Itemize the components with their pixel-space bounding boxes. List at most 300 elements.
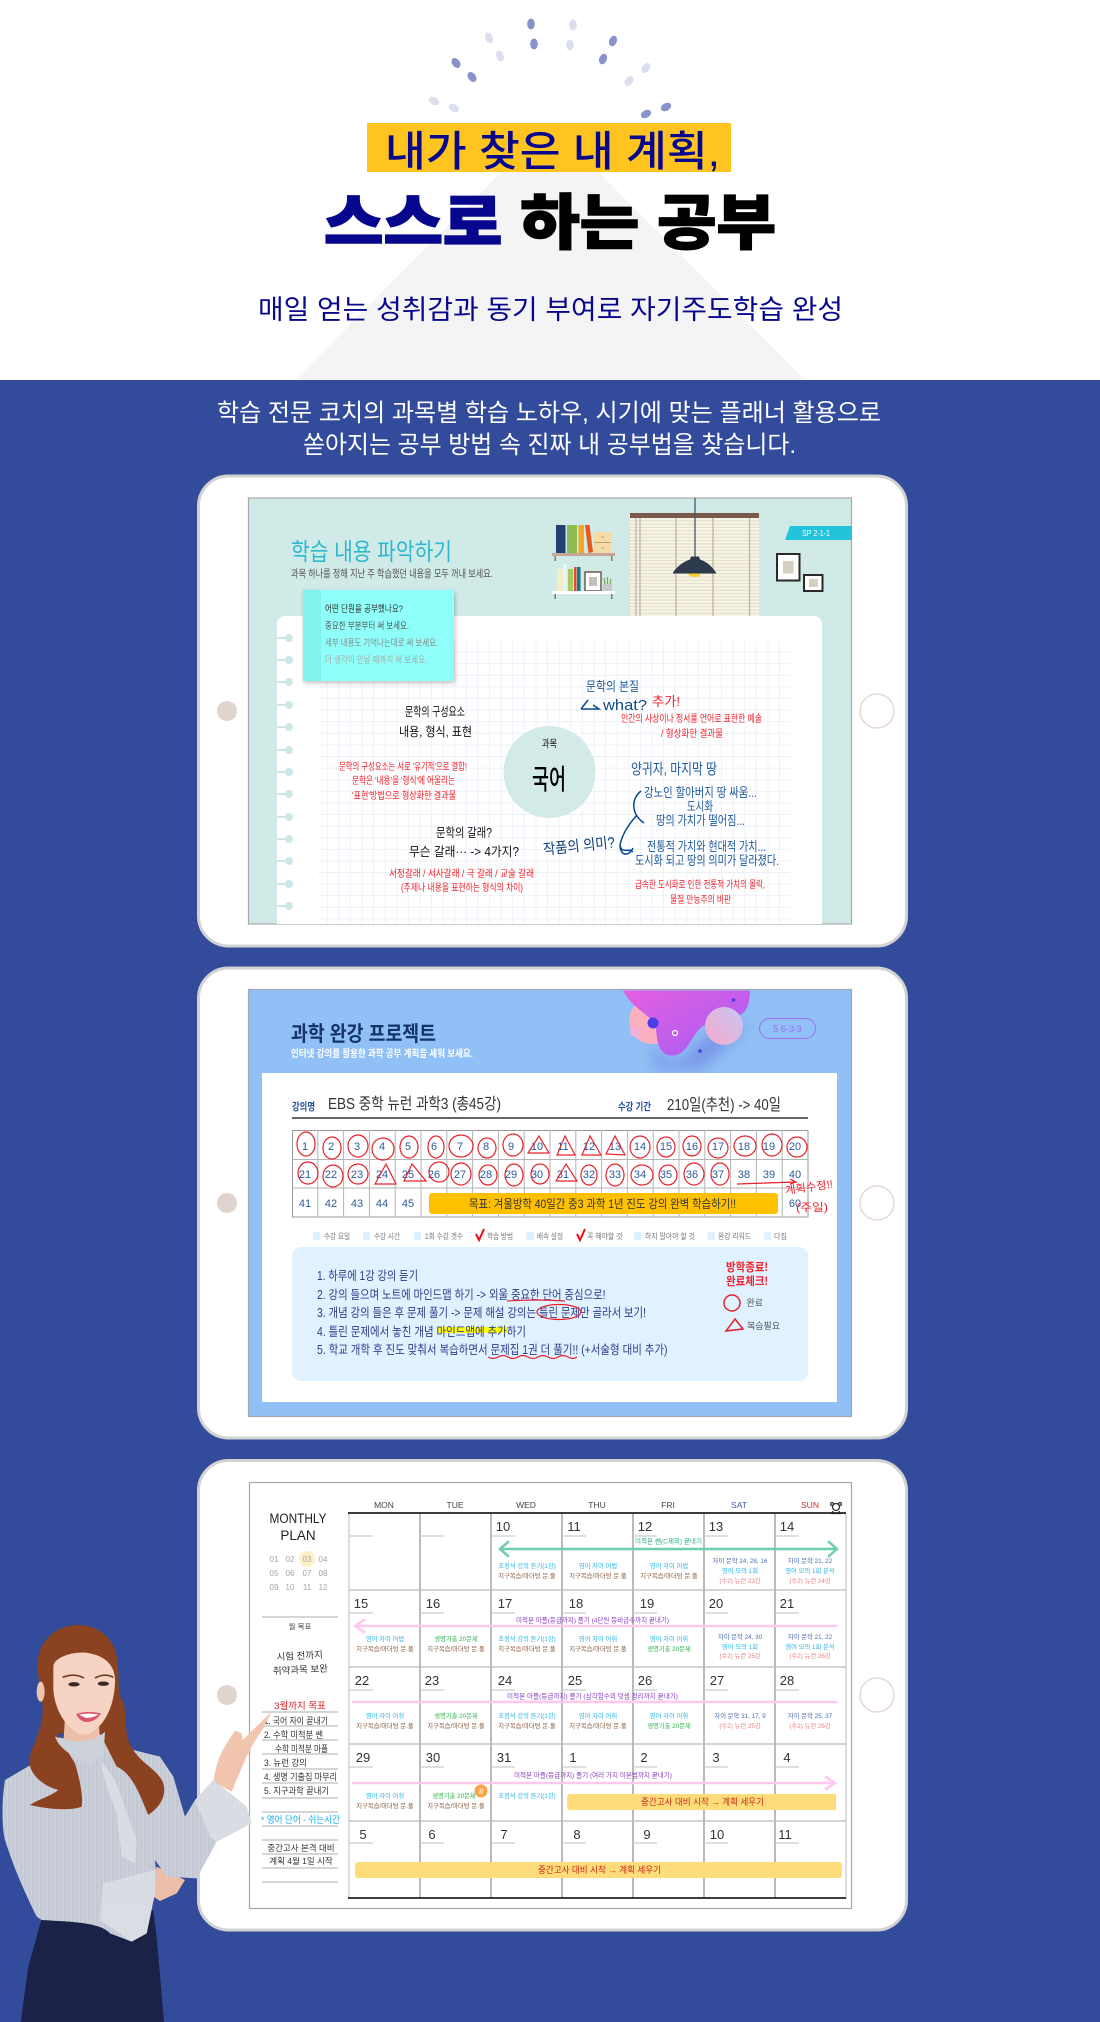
- panel: tablet 2, science lecture project: [198, 968, 906, 1438]
- calendar date numbers: 15: [354, 1596, 368, 1611]
- calendar weekday headers: SAT: [731, 1500, 747, 1510]
- trousers: [21, 1910, 164, 2022]
- calendar task text: (수2) 뉴런 26강: [789, 1721, 831, 1730]
- blouse ruffle and cuffs: [100, 1760, 252, 1942]
- sidebar: goals list: 취약과목 보완: [273, 1663, 328, 1677]
- calendar date numbers: 26: [638, 1673, 652, 1688]
- goal banner: [429, 1193, 778, 1214]
- lecture check table: 22: [325, 1169, 337, 1181]
- sidebar: month selector: 06: [286, 1569, 295, 1578]
- lecture check table: 6: [431, 1141, 437, 1153]
- calendar date numbers: 11: [778, 1827, 792, 1842]
- handwritten notes: components of literature: [339, 705, 472, 802]
- handwritten notes: essence of literature: 추가!: [652, 694, 680, 709]
- lecture name and period row: 수강 기간: [618, 1100, 651, 1113]
- notebook rings: [277, 634, 293, 910]
- facial features: [63, 1675, 113, 1722]
- calendar task text: 영어 모의 1회 분석: [785, 1566, 835, 1575]
- title line 2: 스스로 하는 공부: [324, 190, 776, 257]
- handwritten notes: the last land: 물질 만능주의 비판: [670, 894, 731, 906]
- calendar task text: 지구복습/마더텅 문.풀: [498, 1571, 556, 1580]
- calendar weekday headers: MON: [374, 1500, 394, 1510]
- handwritten notes: genres of literature: 서정갈래 / 서사갈래 / 극 갈래 / 교술 갈래: [389, 867, 534, 880]
- red handwritten annotation: [737, 1178, 834, 1214]
- calendar date numbers: 16: [426, 1596, 440, 1611]
- sticky note: 어떤 단원을 공부했나요?: [325, 603, 403, 615]
- lecture check table: 15: [660, 1141, 672, 1153]
- calendar task text: 지구복습/마더텅 문.풀: [498, 1721, 556, 1730]
- handwritten notes: the last land: 땅의 가치가 떨어짐...: [656, 813, 745, 828]
- sidebar: goals list: 계획 4월 1일 시작: [269, 1856, 333, 1866]
- completion check key: 복습필요: [747, 1320, 780, 1331]
- calendar task text: 초정석 강의 듣기(1강): [498, 1634, 556, 1643]
- person: presenter pointing at the plan: [2, 1625, 272, 2022]
- legend row: 하지 말아야 할 것: [645, 1231, 695, 1241]
- lecture check table: 25: [402, 1169, 414, 1181]
- study method box: 2. 강의 들으며 노트에 마인드맵 하기 -> 외울 중요한 단어 중심으로!: [317, 1288, 606, 1302]
- lecture check table: 9: [508, 1141, 514, 1153]
- calendar date numbers: 27: [710, 1673, 724, 1688]
- page heading: 학습 내용 파악하기: [291, 539, 452, 566]
- sidebar: goals list: 시험 전까지: [276, 1650, 323, 1663]
- legend row: 배속 설정: [537, 1231, 563, 1241]
- sidebar: monthly plan heading: MONTHLY: [270, 1511, 326, 1526]
- exam preparation bars: 중간고사 대비 시작 → 계획 세우기: [538, 1864, 661, 1875]
- calendar date numbers: 21: [780, 1596, 794, 1611]
- lecture check table: 23: [351, 1169, 363, 1181]
- study method box: 5. 학교 개학 후 진도 맞춰서 복습하면서 문제집 1권 더 풀기!! (+서술형 대비 추가): [317, 1343, 668, 1357]
- calendar task text: 영어 자이 어휘: [650, 1634, 688, 1643]
- calendar date numbers: 9: [643, 1827, 651, 1842]
- screen background: [248, 990, 852, 1416]
- lecture check table: 11: [557, 1141, 569, 1153]
- lecture check table: 10: [531, 1141, 543, 1153]
- calendar grid: [348, 1513, 846, 1898]
- title line 1 with yellow highlight: 내가 찾은 내 계획,: [385, 128, 720, 175]
- handwritten notes: genres of literature: [389, 826, 534, 894]
- calendar task text: 생명기출 20문제: [647, 1721, 691, 1730]
- calendar task text: 생명기출 20문제: [434, 1711, 478, 1720]
- resting hand: [153, 1867, 185, 1901]
- sidebar: month selector: 11: [303, 1583, 312, 1592]
- legend row: 학습 방법: [487, 1231, 513, 1241]
- calendar date numbers: 17: [498, 1596, 512, 1611]
- sidebar: month selector: 10: [286, 1583, 295, 1592]
- calendar task text: 자이 문학 31, 17, 9: [714, 1711, 766, 1720]
- red handwritten annotation: (주일): [796, 1200, 828, 1214]
- ruffled collar: [55, 1732, 105, 1765]
- calendar task text: (수2) 뉴런 24강: [789, 1576, 831, 1585]
- lecture check table: 29: [505, 1169, 517, 1181]
- icon: orange completion badge: [474, 1784, 488, 1798]
- calendar task text: 자이 문학 21, 22: [788, 1556, 833, 1565]
- schedule arrow captions: 미적분 쎈(C제외) 끝내기: [635, 1536, 702, 1546]
- calendar weekday headers: [374, 1500, 819, 1510]
- lecture check table: 8: [483, 1141, 489, 1153]
- sidebar: month selector: [270, 1551, 328, 1592]
- intro text: 학습 전문 코치의 과목별 학습 노하우, 시기에 맞는 플래너 활용으로: [217, 399, 881, 427]
- lecture check table: 1: [302, 1141, 308, 1153]
- calendar task text: 지구복습/마더텅 문.풀: [356, 1721, 414, 1730]
- lecture check table: 35: [660, 1169, 672, 1181]
- lecture check table: 16: [686, 1141, 698, 1153]
- calendar task text: 지구복습/마더텅 문.풀: [427, 1721, 485, 1730]
- subtitle: 매일 얻는 성취감과 동기 부여로 자기주도학습 완성: [258, 295, 843, 325]
- sidebar: month selector: 03: [303, 1555, 312, 1564]
- lecture check table: 42: [325, 1198, 337, 1210]
- sidebar: month selector: 12: [319, 1583, 328, 1592]
- calendar task text: 영어 모의 1회 분석: [785, 1642, 835, 1651]
- icon: picture frames: [777, 554, 822, 591]
- calendar date numbers: 25: [568, 1673, 582, 1688]
- white content panel: [262, 1073, 837, 1402]
- lecture check table: 36: [686, 1169, 698, 1181]
- lecture check table: 32: [583, 1169, 595, 1181]
- sidebar: month selector: 07: [303, 1569, 312, 1578]
- calendar task text: 초정석 강의 듣기(1강): [498, 1711, 556, 1720]
- background: white header: [0, 0, 1100, 380]
- lecture check table: 39: [763, 1169, 775, 1181]
- sidebar: goals list: * 영어 단어 - 쉬는시간: [261, 1815, 340, 1826]
- tablet home button: [860, 1678, 894, 1712]
- handwritten note and brace: meaning of the work: [542, 791, 644, 859]
- sidebar: month selector: 08: [319, 1569, 328, 1578]
- calendar task text: 영어 자이 어휘: [650, 1711, 688, 1720]
- handwritten notes: essence of literature: [581, 679, 762, 740]
- red handwritten annotation: 계획수정!!: [784, 1178, 834, 1197]
- lecture check table: 31: [557, 1169, 569, 1181]
- lecture check table: 12: [583, 1141, 595, 1153]
- calendar date numbers: 8: [573, 1827, 581, 1842]
- calendar date numbers: 2: [640, 1750, 648, 1765]
- lecture check table: 21: [299, 1169, 311, 1181]
- icon: window blinds: [630, 513, 759, 616]
- completion check key: [724, 1260, 780, 1331]
- legend row: 수강 요일: [324, 1231, 350, 1241]
- sidebar: goals list: 월 목표: [289, 1621, 311, 1631]
- handwritten notes: genres of literature: 문학의 갈래?: [436, 826, 492, 840]
- handwritten notes: components of literature: 문학은 '내용'을 '형식'에 어울리는: [352, 775, 455, 787]
- calendar task text: 자이 문학 24, 28, 16: [713, 1556, 768, 1565]
- sidebar: monthly plan heading: PLAN: [280, 1528, 316, 1543]
- study method box: 3. 개념 강의 들은 후 문제 풀기 -> 문제 해설 강의는 틀린 문제만 골라서 보기!: [317, 1306, 646, 1320]
- calendar task text: 영어 자이 어휘: [579, 1711, 617, 1720]
- lecture check table: 37: [712, 1169, 724, 1181]
- handwritten notes: components of literature: '표현'방법으로 형상화한 결과물: [352, 790, 456, 802]
- notebook grid: [318, 641, 790, 924]
- lecture check table: 20: [789, 1141, 801, 1153]
- sidebar: goals list: 수학 미적분 마플: [275, 1743, 328, 1754]
- intro text: 쏟아지는 공부 방법 속 진짜 내 공부법을 찾습니다.: [303, 431, 796, 459]
- calendar date numbers: 11: [567, 1519, 581, 1534]
- tablet frame: [198, 476, 906, 946]
- handwritten notes: genres of literature: 무슨 갈래··· -> 4가지?: [409, 845, 519, 859]
- sidebar: month selector: 09: [270, 1583, 279, 1592]
- center circle: subject Korean: 과목: [542, 738, 557, 750]
- lecture check table: 5: [405, 1141, 411, 1153]
- handwritten notes: the last land: 도시화 되고 땅의 의미가 달라졌다.: [635, 853, 779, 868]
- calendar task text: 지구복습/마더텅 문.풀: [427, 1801, 485, 1810]
- calendar task text: (수2) 뉴런 26강: [789, 1651, 831, 1660]
- calendar date numbers: 10: [710, 1827, 724, 1842]
- legend row: 다짐: [774, 1231, 787, 1241]
- tablet home button: [860, 694, 894, 728]
- lecture name and period row: 210일(추천) -> 40일: [667, 1096, 781, 1114]
- exam preparation bars: [355, 1794, 842, 1878]
- handwritten notes: components of literature: 문학의 구성요소는 서로 '유기적'으로 결합!: [339, 761, 467, 773]
- lecture check table: 60: [789, 1198, 801, 1210]
- raised hand: [213, 1712, 272, 1792]
- lecture check table: 28: [480, 1169, 492, 1181]
- panel: tablet 3, monthly plan calendar: [198, 1460, 906, 1930]
- intro text: [217, 399, 881, 459]
- calendar date numbers: 31: [497, 1750, 511, 1765]
- sidebar: month selector: 01: [270, 1555, 279, 1564]
- schedule arrow captions: [507, 1536, 702, 1780]
- handwritten note and brace: meaning of the work: 작품의 의미?: [542, 834, 616, 859]
- calendar task text: 영어 자이 어법: [579, 1561, 617, 1570]
- lecture name and period row: 강의명: [292, 1101, 315, 1113]
- calendar task text: 생명기출 20문제: [647, 1644, 691, 1653]
- calendar task text: 지구복습/마더텅 문.풀: [427, 1644, 485, 1653]
- sidebar: month selector: 02: [286, 1555, 295, 1564]
- lecture check table: 30: [531, 1169, 543, 1181]
- calendar date numbers: 14: [780, 1519, 794, 1534]
- lecture check table: 41: [299, 1198, 311, 1210]
- calendar date numbers: 29: [356, 1750, 370, 1765]
- handwritten notes: components of literature: 내용, 형식, 표현: [399, 725, 472, 739]
- calendar task text: (수2) 뉴런 25강: [719, 1721, 761, 1730]
- lecture check table: 27: [454, 1169, 466, 1181]
- calendar task text: 자이 문학 25, 37: [788, 1711, 833, 1720]
- calendar date numbers: 5: [359, 1827, 367, 1842]
- schedule arrow captions: 미적분 마플(등급까지) 풀기 (여러 가지 미분법까지 끝내기): [514, 1770, 672, 1780]
- calendar date numbers: 30: [426, 1750, 440, 1765]
- neck: [63, 1713, 100, 1743]
- icon: burst of radial dots: [427, 18, 673, 120]
- calendar date numbers: 18: [569, 1596, 583, 1611]
- completion check key: 완료: [746, 1298, 763, 1308]
- sidebar: goals list: 4. 생명 기출집 마무리: [264, 1771, 337, 1782]
- calendar task text: 초정석 강의 듣기(1강): [498, 1561, 556, 1570]
- tablet frame: [198, 968, 906, 1438]
- page subheading: 과목 하나를 정해 지난 주 학습했던 내용을 모두 꺼내 보세요.: [291, 567, 493, 580]
- calendar weekday headers: THU: [588, 1500, 606, 1510]
- lecture check table: 33: [609, 1169, 621, 1181]
- goal banner: 목표: 겨울방학 40일간 중3 과학 1년 진도 강의 완벽 학습하기!!: [469, 1197, 736, 1211]
- sidebar: goals list: 중간고사 본격 대비: [267, 1843, 335, 1853]
- center circle: subject Korean: [504, 726, 596, 818]
- lecture check table: 44: [376, 1198, 388, 1210]
- lecture check table: 38: [738, 1169, 750, 1181]
- calendar weekday headers: TUE: [446, 1500, 464, 1510]
- study method box: [292, 1247, 808, 1381]
- calendar date numbers: 20: [709, 1596, 723, 1611]
- calendar task text: (수2) 뉴런 25강: [719, 1651, 761, 1660]
- calendar task text: 자이 문학 24, 30: [718, 1632, 763, 1641]
- calendar weekday headers: SUN: [801, 1500, 819, 1510]
- calendar task text: 영어 자이 어법: [650, 1561, 688, 1570]
- calendar date numbers: 7: [500, 1827, 508, 1842]
- calendar task text: 지구복습/마더텅 문.풀: [498, 1644, 556, 1653]
- handwritten notes: the last land: 급속한 도시화로 인한 전통적 가치의 몰락,: [635, 879, 765, 891]
- calendar date numbers: 3: [712, 1750, 720, 1765]
- icon: hanging lamp: [673, 498, 716, 577]
- handwritten notes: essence of literature: / 형상화한 결과물: [661, 728, 723, 740]
- calendar task text: 초정석 강의 듣기(1강): [498, 1791, 556, 1800]
- tag: 5 6-3-3: 5 6-3-3: [773, 1024, 802, 1034]
- completion check key: 방학종료!: [726, 1260, 768, 1274]
- lecture check table: 43: [351, 1198, 363, 1210]
- screen background: [250, 1482, 852, 1908]
- calendar task text: 지구복습/마더텅 문.풀: [640, 1571, 698, 1580]
- lecture check table: 24: [376, 1169, 388, 1181]
- calendar date numbers: 10: [496, 1519, 510, 1534]
- calendar task text: 자이 문학 21, 22: [788, 1632, 833, 1641]
- lecture check table: 18: [738, 1141, 750, 1153]
- tag: 5 6-3-3: [760, 1018, 816, 1038]
- sticky note: 중요한 부분부터 써 보세요.: [325, 621, 409, 632]
- screen background: [248, 498, 852, 924]
- tablet camera dot: [217, 701, 237, 721]
- handwritten notes: essence of literature: what?: [602, 697, 647, 714]
- handwritten notes: the last land: [631, 761, 779, 906]
- sidebar: goals list: 3. 뉴런 강의: [264, 1758, 307, 1768]
- sticky note: 더 생각이 안날 때까지 써 보세요.: [325, 654, 427, 666]
- calendar task text: 지구복습/마더텅 문.풀: [569, 1571, 627, 1580]
- tablet camera dot: [217, 1193, 237, 1213]
- calendar date numbers: 24: [498, 1673, 512, 1688]
- calendar weekday headers: FRI: [661, 1500, 675, 1510]
- calendar task text: 영어 자이 어휘: [366, 1791, 404, 1800]
- handwritten notes: the last land: 강노인 할아버지 땅 싸움...: [644, 785, 757, 800]
- sidebar: goals list: [261, 1617, 340, 1882]
- sidebar: month selector: 04: [319, 1555, 328, 1564]
- face: [53, 1652, 115, 1735]
- calendar date numbers: 1: [569, 1750, 577, 1765]
- calendar task text: 영어 모의 1회: [722, 1566, 758, 1575]
- completion check key: 완료체크!: [726, 1275, 768, 1288]
- schedule arrow captions: 미적분 마플(등급까지) 풀기 (삼각함수의 덧셈 정리까지 끝내기): [507, 1692, 678, 1700]
- handwritten notes: the last land: 전통적 가치와 현대적 가치...: [647, 839, 766, 854]
- calendar task text: [356, 1556, 835, 1810]
- study method box: 4. 틀린 문제에서 놓친 개념 마인드맵에 추가하기: [317, 1325, 526, 1339]
- highlight: [437, 1327, 507, 1333]
- tag: SP 2-1-1: SP 2-1-1: [802, 528, 830, 538]
- lecture check table: 2: [328, 1141, 334, 1153]
- calendar date numbers: 6: [428, 1827, 436, 1842]
- lecture check table: 40: [789, 1169, 801, 1181]
- blouse: [2, 1732, 252, 1942]
- study method box: 1. 하루에 1강 강의 듣기: [317, 1269, 418, 1283]
- sticky note: 세부 내용도 기억나는대로 써 보세요.: [325, 637, 438, 649]
- exam preparation bars: 중간고사 대비 시작 → 계획 세우기: [641, 1796, 764, 1807]
- center circle: subject Korean: 국어: [532, 764, 566, 795]
- subheading: 인터넷 강의를 활용한 과학 공부 계획을 세워 보세요.: [291, 1047, 473, 1060]
- handwritten notes: components of literature: 문학의 구성요소: [405, 705, 465, 719]
- calendar task text: 영어 자이 어휘: [579, 1634, 617, 1643]
- handwritten notes: essence of literature: 인간의 사상이나 정서를 언어로 표현한 예술: [621, 713, 762, 725]
- calendar task text: 영어 자이 어휘: [366, 1711, 404, 1720]
- calendar task text: 영어 모의 1회: [722, 1642, 758, 1651]
- icon: orange completion badge: 끝: [478, 1788, 484, 1796]
- sidebar: goals list: 1. 국어 자이 끝내기: [264, 1716, 328, 1726]
- calendar date numbers: 28: [780, 1673, 794, 1688]
- calendar date numbers: 19: [640, 1596, 654, 1611]
- lecture check table: 34: [634, 1169, 646, 1181]
- calendar task text: 지구복습/마더텅 문.풀: [569, 1721, 627, 1730]
- calendar date numbers: 12: [638, 1519, 652, 1534]
- tablet home button: [860, 1186, 894, 1220]
- calendar task text: 지구복습/마더텅 문.풀: [356, 1801, 414, 1810]
- legend row: 1회 수강 갯수: [425, 1231, 463, 1241]
- tablet camera dot: [217, 1685, 237, 1705]
- icon: shelves with books: [552, 525, 615, 599]
- sidebar: monthly plan heading: [270, 1511, 326, 1543]
- calendar weekday headers: WED: [516, 1500, 536, 1510]
- handwritten notes: genres of literature: (주제나 내용을 표현하는 형식의 차이): [401, 881, 523, 894]
- panel: tablet 1, study content mind map: [198, 476, 906, 946]
- background: grey triangle: [295, 123, 805, 380]
- lecture check table: 45: [402, 1198, 414, 1210]
- lecture check table: 4: [379, 1141, 385, 1153]
- tablet frame: [198, 1460, 906, 1930]
- sticky note: [303, 590, 454, 681]
- sidebar: goals list: 5. 지구과학 끝내기: [264, 1786, 329, 1796]
- calendar task text: 생명기출 20문제: [434, 1634, 478, 1643]
- lecture check table: 7: [457, 1141, 463, 1153]
- calendar date numbers: 23: [425, 1673, 439, 1688]
- sidebar: month selector: 05: [270, 1569, 279, 1578]
- sidebar: goals list: 3월까지 목표: [274, 1700, 326, 1712]
- calendar date numbers: 13: [709, 1519, 723, 1534]
- calendar task text: 지구복습/마더텅 문.풀: [356, 1644, 414, 1653]
- lecture name and period row: [292, 1095, 808, 1118]
- legend row: 수강 시간: [374, 1231, 401, 1241]
- lecture check table: 13: [609, 1141, 621, 1153]
- icon: bear mascot: [830, 1502, 842, 1514]
- calendar task text: 영어 자이 어법: [366, 1634, 404, 1643]
- handwritten notes: the last land: 도시화: [687, 799, 713, 814]
- calendar task text: 생명기출 20문제: [432, 1791, 476, 1800]
- red annotations: [488, 1300, 581, 1358]
- sidebar: goals list: 2. 수학 미적분 쎈: [264, 1729, 323, 1740]
- lecture check table: 14: [634, 1141, 646, 1153]
- legend row: 완강 리워드: [718, 1231, 751, 1241]
- calendar task text: 지구복습/마더텅 문.풀: [569, 1644, 627, 1653]
- handwritten notes: the last land: 양귀자, 마지막 땅: [631, 761, 717, 778]
- calendar date numbers: 4: [783, 1750, 791, 1765]
- notebook page: [277, 616, 822, 924]
- lecture check table: 19: [763, 1141, 775, 1153]
- legend row: [313, 1229, 787, 1241]
- calendar date numbers: [354, 1519, 794, 1842]
- decorative blob: [623, 990, 750, 1070]
- ear: [37, 1682, 45, 1702]
- legend row: 꼭 해야할 것: [587, 1231, 622, 1241]
- heading: 과학 완강 프로젝트: [291, 1023, 436, 1046]
- lecture check table: [292, 1130, 808, 1217]
- lecture check table: 17: [712, 1141, 724, 1153]
- calendar date numbers: 22: [355, 1673, 369, 1688]
- calendar task text: (수2) 뉴런 23강: [719, 1576, 761, 1585]
- schedule arrows: [353, 1542, 837, 1789]
- lecture check table: 26: [428, 1169, 440, 1181]
- schedule arrow captions: 미적분 마플(등급까지) 풀기 (4단원 등비급수까지 끝내기): [516, 1616, 669, 1624]
- tag: SP 2-1-1: [785, 526, 852, 540]
- lecture name and period row: EBS 중학 뉴런 과학3 (총45강): [328, 1095, 501, 1113]
- hair: [29, 1625, 164, 1815]
